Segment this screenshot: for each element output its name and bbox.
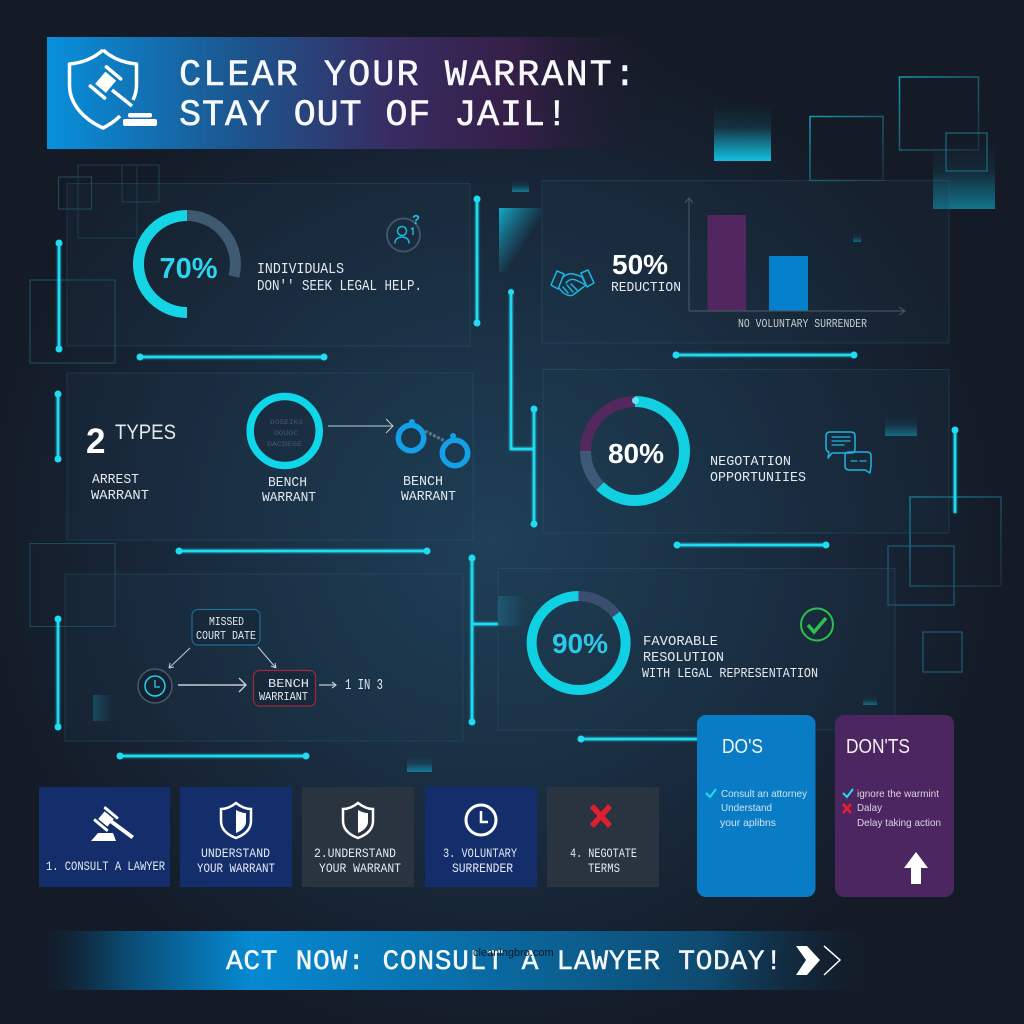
card: do's: DO'S — [722, 736, 763, 758]
icon: shield — [221, 803, 251, 838]
text: arrest warrant: WARRANT — [91, 488, 149, 504]
watermark: cleaningbro.com — [473, 947, 554, 959]
card: don'ts: ignore the warmint — [857, 788, 939, 800]
step 4: negotate terms: 4. NEGOTATE — [570, 846, 637, 861]
arrow — [328, 419, 393, 433]
icon: person with question mark — [387, 212, 420, 252]
card: do's: Consult an attorney — [721, 788, 808, 800]
icon: up arrow — [904, 852, 928, 884]
text: individuals: DON'' SEEK LEGAL HELP. — [257, 279, 422, 295]
stat: 2 types — [86, 421, 176, 461]
title banner — [47, 37, 672, 149]
step 4: negotate terms: TERMS — [588, 861, 620, 876]
ring: bench warrant: DOUOC — [274, 430, 298, 437]
text: bench warrant right: WARRANT — [401, 489, 456, 505]
step 2: understand your warrant — [302, 787, 414, 887]
step: understand your warrant: YOUR WARRANT — [197, 861, 275, 876]
donut chart: 70%: 70% — [159, 253, 218, 285]
icon: clock — [466, 805, 496, 835]
box: missed court date — [192, 610, 260, 645]
panel: missed court date flow — [65, 574, 463, 741]
card: don'ts: DON'TS — [846, 736, 910, 758]
text: favorable resolution: RESOLUTION — [643, 650, 724, 666]
card: don'ts — [835, 715, 954, 897]
card: do's — [697, 715, 816, 897]
connector lines — [54, 196, 958, 760]
stat: 2 types: TYPES — [115, 421, 176, 444]
text: bench warrant middle: WARRANT — [262, 490, 316, 506]
panel: 90 percent favorable resolution — [498, 568, 895, 730]
step 4: negotate terms — [547, 787, 659, 887]
step: understand your warrant: UNDERSTAND — [201, 846, 270, 861]
text: individuals — [257, 262, 422, 295]
call to action banner: ACT NOW: CONSULT A LAWYER TODAY! — [226, 947, 782, 978]
bar chart — [685, 198, 905, 331]
donut chart: 90%: 90% — [552, 628, 608, 659]
icon: handcuffs — [398, 419, 468, 466]
text: favorable resolution: WITH LEGAL REPRESENTATION — [642, 666, 818, 682]
text: bench warrant middle: BENCH — [268, 475, 307, 491]
step 3: voluntary surrender: 3. VOLUNTARY — [443, 846, 517, 861]
text: favorable resolution: FAVORABLE — [643, 634, 718, 650]
text: favorable resolution — [642, 634, 818, 682]
card: do's: Understand — [721, 802, 772, 814]
panel: 70 percent individuals — [67, 184, 470, 346]
icon: red x — [592, 806, 610, 826]
text: bench warrant right — [401, 474, 456, 505]
panel: 80 percent negotiation — [543, 370, 949, 533]
text: bench warrant right: BENCH — [403, 474, 443, 490]
icon: gavel — [91, 806, 134, 841]
donut chart: 70% — [138, 216, 235, 312]
stat: 50% reduction: 50% — [612, 249, 668, 280]
box: bench warrant: BENCH — [268, 677, 309, 691]
donut chart: 80%: 80% — [608, 438, 664, 469]
box: missed court date: COURT DATE — [196, 629, 256, 643]
text: bench warrant middle — [262, 475, 316, 506]
text: individuals: INDIVIDUALS — [257, 262, 344, 278]
ring: bench warrant: DACDEGE — [267, 441, 302, 448]
text: arrest warrant — [91, 472, 149, 504]
donut chart: 90% — [532, 596, 626, 690]
box: bench warrant: WARRIANT — [259, 690, 308, 704]
stat: 1 in 3: 1 IN 3 — [345, 677, 383, 694]
bar chart: NO VOLUNTARY SURRENDER — [738, 317, 867, 331]
icon: shield with gavel — [70, 50, 157, 128]
donut chart: 80% — [586, 397, 685, 500]
step 2: understand your warrant: YOUR WARRANT — [319, 861, 401, 876]
text: negotiation opportunities — [710, 454, 806, 486]
panel: two warrant types — [67, 373, 473, 540]
step: understand your warrant — [180, 787, 292, 887]
icon: chevrons — [796, 946, 840, 975]
call to action banner — [42, 931, 877, 990]
title text: CLEAR YOUR WARRANT: — [179, 55, 636, 97]
box: missed court date: MISSED — [209, 615, 244, 629]
decorative squares and glow blocks — [30, 77, 1001, 772]
step 3: voluntary surrender: SURRENDER — [452, 861, 513, 876]
text: negotiation opportunities: OPPORTUNIIES — [710, 470, 806, 486]
icon: person with question mark: ? — [412, 212, 420, 227]
icon: shield — [343, 803, 373, 838]
icon: clock — [138, 669, 172, 703]
ring: bench warrant — [250, 396, 319, 466]
panel: 50 percent reduction — [542, 180, 949, 343]
card: don'ts: Delay taking action — [857, 817, 941, 829]
step 2: understand your warrant: 2.UNDERSTAND — [314, 846, 396, 861]
card: don'ts: Dalay — [857, 802, 883, 814]
icon: chat bubbles — [826, 432, 871, 473]
arrows — [169, 647, 336, 692]
box: bench warrant — [254, 670, 316, 706]
stat: 50% reduction: REDUCTION — [611, 280, 681, 296]
step 3: voluntary surrender — [425, 787, 537, 887]
title banner: STAY OUT OF JAIL! — [179, 95, 568, 137]
card: do's: your aplibns — [720, 817, 776, 829]
stat: 2 types: 2 — [86, 422, 105, 461]
icon: green check — [801, 608, 833, 640]
ring: bench warrant: DOSEIKS — [270, 419, 303, 426]
text: arrest warrant: ARREST — [92, 472, 139, 488]
text: negotiation opportunities: NEGOTATION — [710, 454, 791, 470]
step 1: consult a lawyer — [39, 787, 170, 887]
step 1: consult a lawyer: 1. CONSULT A LAWYER — [46, 859, 165, 874]
stat: 50% reduction — [611, 249, 681, 296]
icon: handshake — [551, 270, 594, 296]
